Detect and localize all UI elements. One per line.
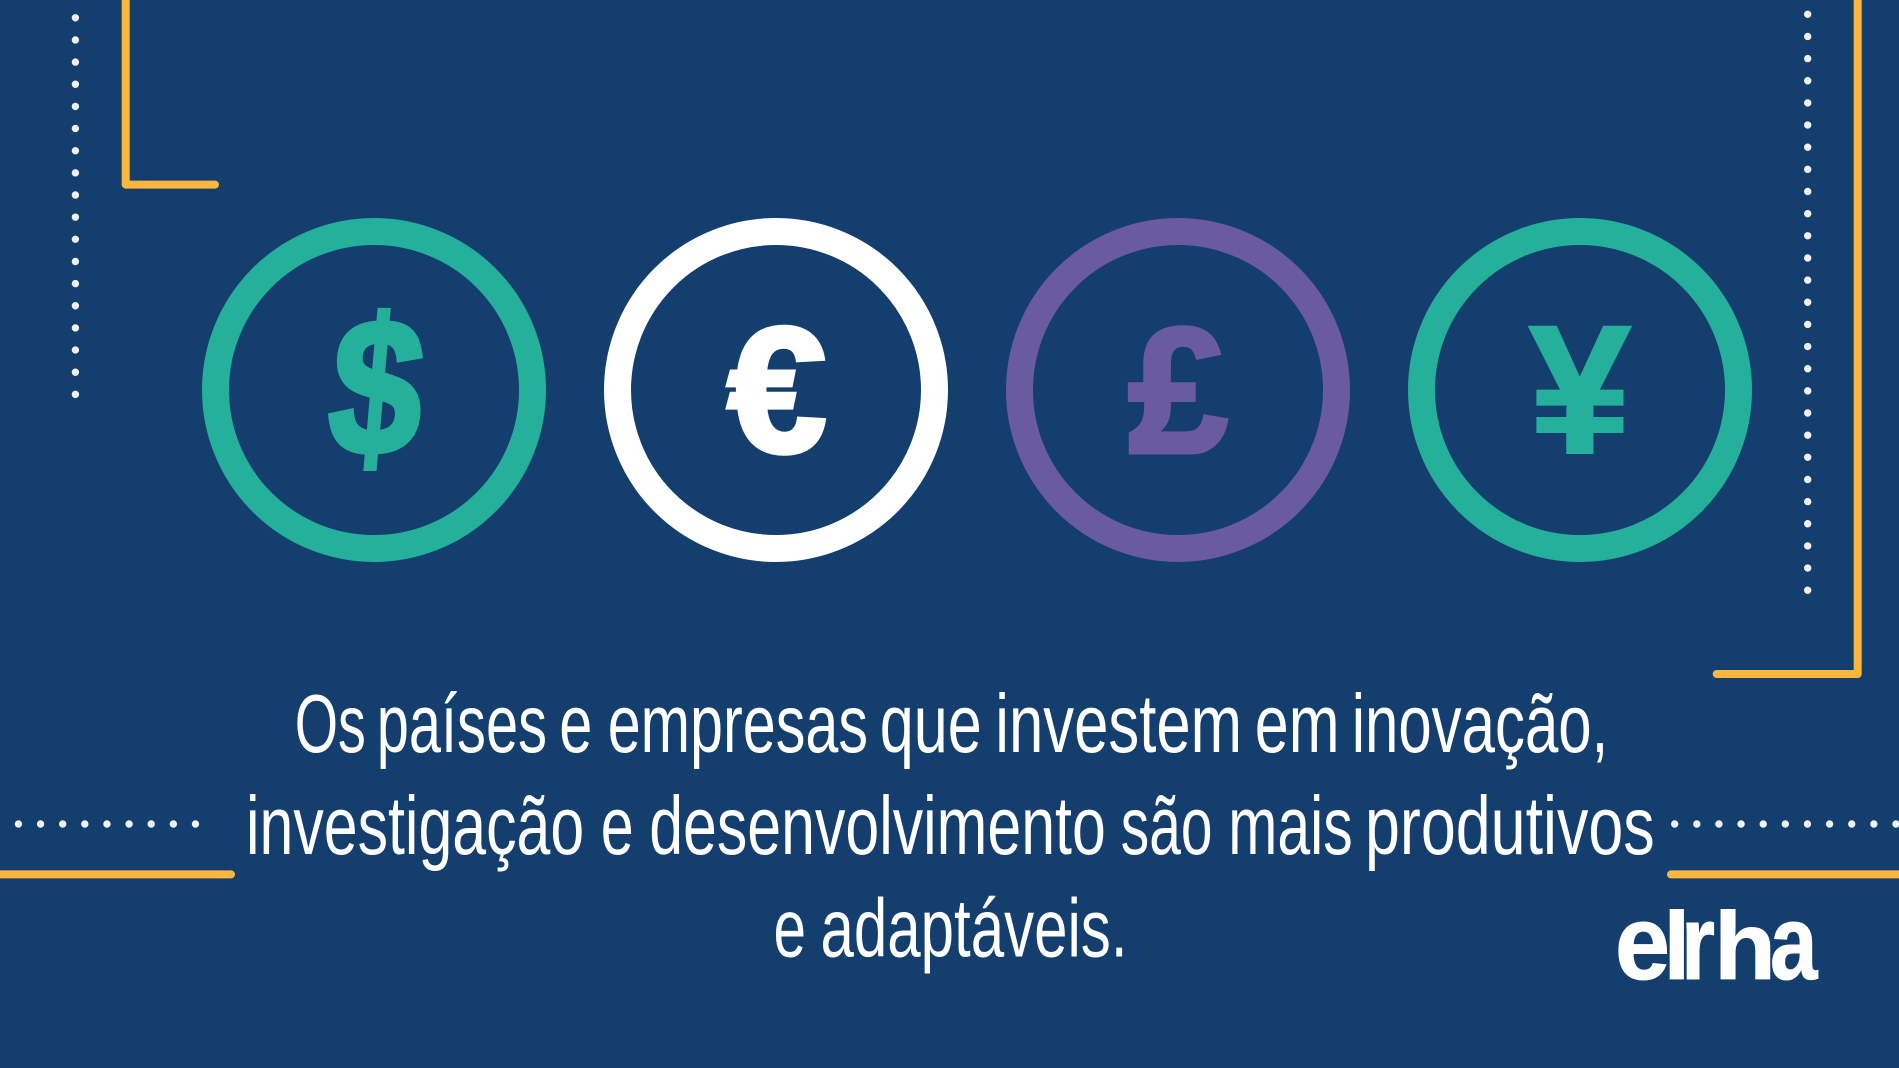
yellow corner bracket: top right (1717, 0, 1858, 674)
dotted line: top right vertical (1804, 14, 1811, 592)
main statement text: e (601, 779, 634, 872)
yellow line: bottom left (0, 870, 231, 878)
main statement text: mais (1228, 779, 1353, 872)
main statement text (246, 677, 1655, 974)
logo: elrha: l (1664, 893, 1690, 1000)
coin icon: yen: ¥ (1529, 288, 1631, 492)
logo: elrha: a (1770, 884, 1818, 1002)
logo: elrha: h (1714, 893, 1776, 1000)
main statement text: são (1121, 779, 1212, 872)
logo: elrha: r (1681, 884, 1715, 1002)
main statement text: investigação (246, 779, 584, 872)
main statement text: em (1255, 677, 1340, 770)
main statement text: Os (295, 677, 366, 770)
dotted line: top left vertical (72, 18, 79, 395)
main statement text: países (377, 677, 547, 770)
dotted line: right horizontal (1675, 820, 1899, 828)
main statement text: empresas (608, 677, 868, 770)
logo: elrha (1615, 884, 1818, 1002)
main statement text: e (774, 882, 806, 974)
coin icon: yen (1422, 232, 1738, 548)
coin icon: euro: € (728, 290, 826, 490)
main statement text: que (880, 677, 982, 770)
logo: elrha: e (1615, 884, 1670, 1002)
coin icon: dollar: $ (321, 280, 432, 496)
main statement text: investem (995, 677, 1242, 770)
main statement text: produtivos (1365, 779, 1655, 872)
coin icon: pound: £ (1128, 291, 1228, 490)
main statement text: inovação, (1352, 677, 1608, 770)
yellow corner bracket: top left (126, 0, 215, 185)
main statement text: e (559, 677, 592, 770)
coin icon: pound (1020, 232, 1336, 548)
main statement text: adaptáveis. (820, 882, 1128, 974)
coin icon: dollar (216, 232, 532, 548)
dotted line: left horizontal (0, 820, 196, 828)
coin icon: euro (618, 232, 934, 548)
main statement text: desenvolvimento (649, 779, 1106, 872)
yellow line: bottom right (1671, 870, 1899, 878)
